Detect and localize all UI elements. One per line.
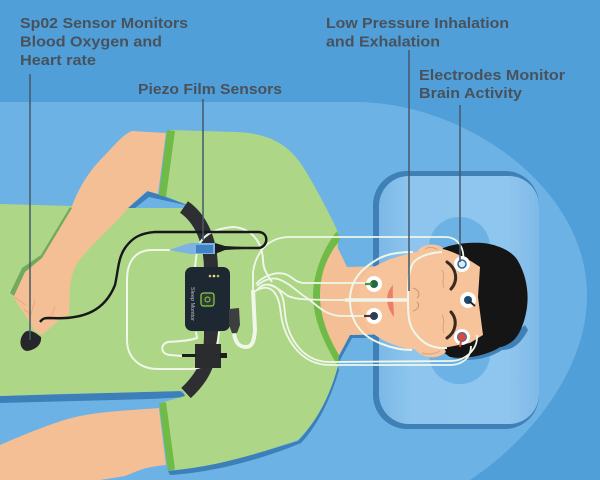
- electrodes: [364, 256, 476, 347]
- leader lines: [30, 50, 460, 340]
- left sensor wire: [127, 250, 219, 369]
- spo2 finger sensor: [20, 331, 41, 351]
- label: piezo film sensors: Piezo Film Sensors: [138, 81, 282, 98]
- bed surface: [0, 102, 587, 480]
- cannula loop: [350, 252, 413, 350]
- clip and connector: [182, 344, 227, 368]
- right eye: [447, 262, 456, 289]
- label: spo2 sensor: Heart rate: [20, 52, 96, 69]
- cannula tube: [260, 285, 345, 300]
- collar: [313, 231, 340, 366]
- patient body: [0, 130, 385, 480]
- device button icon: [201, 293, 214, 306]
- lower sleeve cuff: [159, 402, 175, 471]
- ears: [413, 244, 446, 357]
- label: low pressure: Low Pressure Inhalation: [326, 15, 509, 32]
- eyelid creases: [442, 270, 444, 333]
- electrode: chin brown: [364, 308, 382, 324]
- hair shadow: [452, 325, 528, 360]
- arc over belt: [195, 227, 272, 282]
- neck skin: [320, 240, 385, 357]
- head: [360, 243, 528, 360]
- hair: [440, 243, 528, 358]
- label: spo2 sensor: Sp02 Sensor Monitors: [20, 15, 188, 32]
- bottom head wires: [257, 285, 477, 362]
- sensor wires: [127, 227, 477, 369]
- chest belt: [184, 207, 211, 393]
- electrode: forehead centre: [460, 292, 476, 308]
- arm skin raised: [12, 131, 166, 335]
- label: electrodes: Brain Activity: [419, 85, 523, 102]
- torso and shirt: [0, 130, 338, 470]
- arm shadow line: [10, 207, 72, 296]
- sleeve and shoulder shadow: [168, 366, 339, 475]
- neck shadow: [338, 335, 378, 362]
- main device wire: [234, 290, 255, 347]
- pillow: [373, 171, 539, 429]
- lips: [387, 285, 394, 317]
- sleep monitor device: [185, 267, 230, 331]
- small device loop: [162, 332, 197, 356]
- electrode: forehead top: [454, 256, 470, 272]
- left eye: [447, 312, 455, 338]
- nose: [413, 288, 419, 311]
- top head wire: [253, 237, 463, 290]
- label: spo2 sensor: Blood Oxygen and: [20, 34, 162, 50]
- label: electrodes: Electrodes Monitor: [419, 67, 565, 84]
- underarm notch: [128, 191, 190, 208]
- device status lights: [209, 275, 219, 277]
- forearm skin: [0, 408, 166, 480]
- upper sleeve cuff: [159, 130, 175, 197]
- label: low pressure: and Exhalation: [326, 34, 440, 50]
- face: [360, 248, 483, 349]
- side plug: [229, 308, 240, 333]
- device label: Sleep Monitor: [189, 287, 195, 321]
- finger lines: [14, 297, 55, 318]
- torso shadow: [0, 391, 188, 403]
- electrode: chin green: [365, 276, 382, 292]
- piezo sensor: [169, 243, 262, 254]
- ear details: [422, 247, 440, 354]
- electrode wires: [256, 273, 366, 284]
- electrode: forehead lower: [454, 329, 470, 347]
- spo2 wire: [40, 232, 266, 322]
